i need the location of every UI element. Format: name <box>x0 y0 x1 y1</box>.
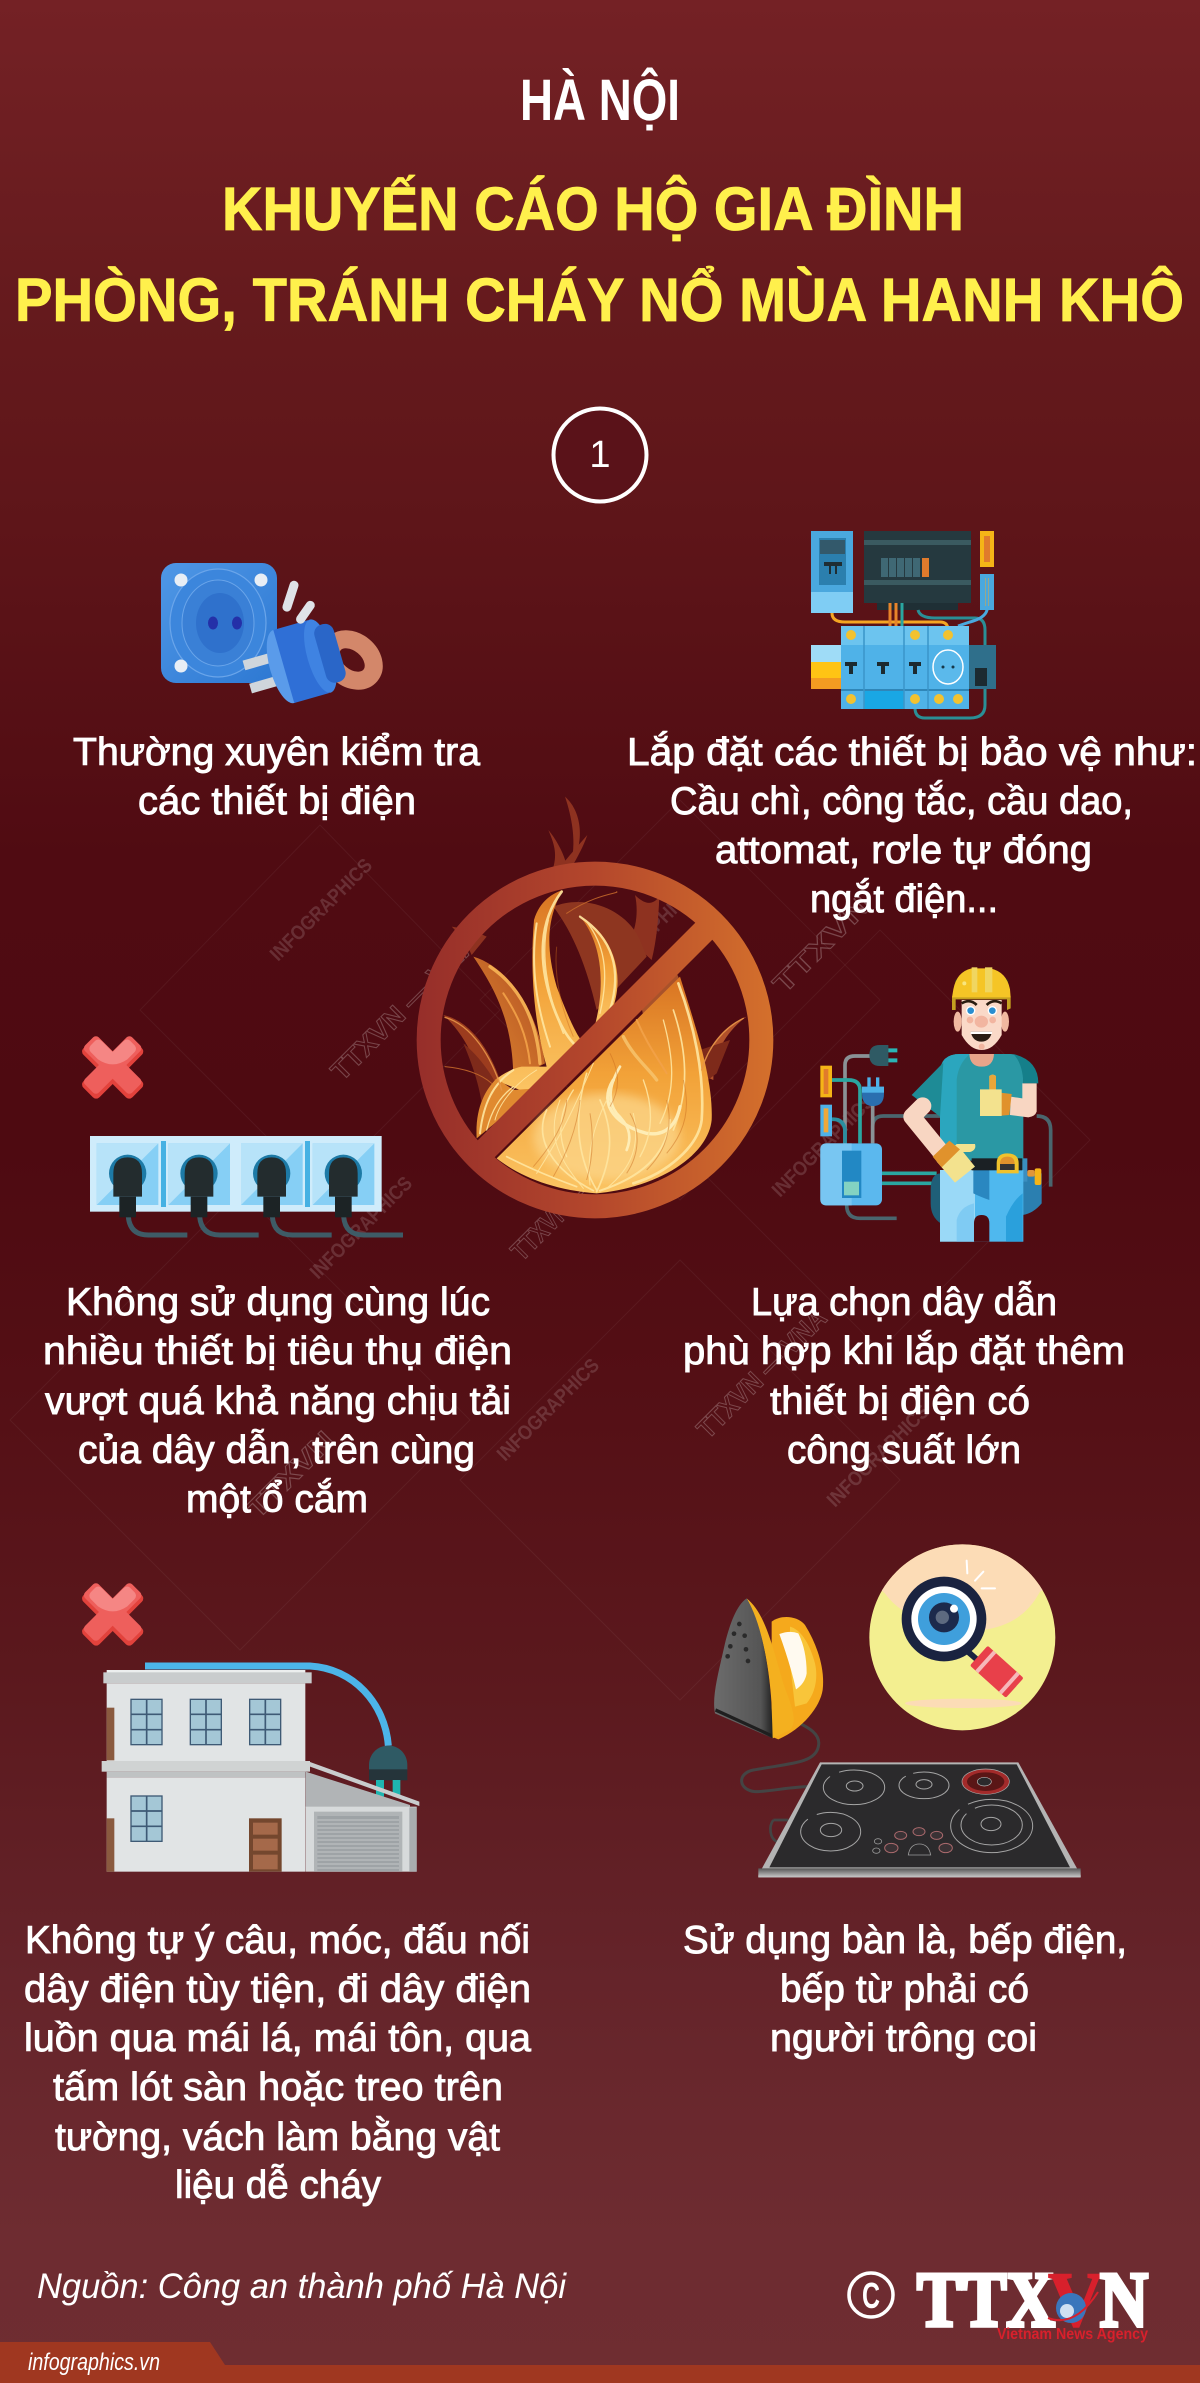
text: kiểm tra thiết bị điện: các thiết bị điện <box>138 780 416 823</box>
watermarks: INFOGRAPHICS <box>306 1173 417 1284</box>
logo: copyright TTXVN: Vietnam News Agency <box>997 2326 1148 2343</box>
watermarks: INFOGRAPHICS <box>266 855 377 966</box>
text: không sử dụng cùng lúc: của dây dẫn, trên cùng <box>78 1429 475 1472</box>
icon: electrician <box>820 967 1051 1242</box>
icon: overloaded power strip <box>90 1136 403 1235</box>
flames <box>443 797 747 1193</box>
number badge 1: 1 <box>589 434 611 476</box>
icon: inspection magnifier circle <box>869 1543 1055 1730</box>
text: kiểm tra thiết bị điện <box>73 731 480 823</box>
center icon: no fire sign <box>429 797 761 1206</box>
text: lựa chọn dây dẫn: Lựa chọn dây dẫn <box>751 1281 1057 1324</box>
title: khuyến cáo <box>15 175 1184 334</box>
text: không tự ý câu móc: tường, vách làm bằng vật <box>55 2116 500 2159</box>
prohibition ring and slash <box>429 874 761 1206</box>
icon: red cross 1 <box>80 1035 145 1101</box>
logo: copyright TTXVN <box>849 2256 1148 2343</box>
text: không tự ý câu móc: dây điện tùy tiện, đi dây điện <box>24 1968 531 2011</box>
watermarks: TTXVN <box>241 1425 340 1524</box>
text: không sử dụng cùng lúc: vượt quá khả năng chịu tải <box>45 1380 511 1423</box>
icon: socket and plug <box>161 563 382 714</box>
icon: electrical panel <box>811 531 996 718</box>
icon: house with wire and plug <box>102 1666 419 1872</box>
text: không sử dụng cùng lúc: Không sử dụng cùng lúc <box>66 1281 490 1324</box>
text: không sử dụng cùng lúc <box>43 1281 512 1521</box>
text: không tự ý câu móc: luồn qua mái lá, mái tôn, qua <box>24 2017 531 2060</box>
source: Nguồn: Công an thành phố Hà Nội <box>37 2267 567 2306</box>
watermarks <box>241 855 934 1524</box>
text: lắp đặt thiết bị bảo vệ <box>627 731 1197 921</box>
logo: copyright TTXVN: V <box>1048 2256 1104 2343</box>
text: không sử dụng cùng lúc: nhiều thiết bị tiêu thụ điện <box>43 1330 512 1373</box>
watermarks: TTXVN — VNA <box>325 927 484 1086</box>
text: không tự ý câu móc: liệu dễ cháy <box>175 2164 381 2207</box>
text: sử dụng bàn là: người trông coi <box>770 2017 1037 2060</box>
text: lựa chọn dây dẫn: công suất lớn <box>787 1429 1021 1472</box>
icon: red cross 2 <box>80 1582 145 1648</box>
footer bar: infographics.vn <box>28 2349 160 2376</box>
text: không tự ý câu móc: Không tự ý câu, móc, đấu nối <box>25 1919 530 1962</box>
text: lắp đặt thiết bị bảo vệ: ngắt điện... <box>810 878 998 921</box>
watermarks: INFOGRAPHICS <box>493 1355 604 1466</box>
logo: copyright TTXVN: C <box>862 2275 880 2316</box>
watermarks: INFOGRAPHICS <box>768 1091 879 1202</box>
text: lựa chọn dây dẫn: thiết bị điện có <box>770 1380 1030 1423</box>
text: lựa chọn dây dẫn <box>683 1281 1125 1472</box>
watermarks: INFOGRAPHICS <box>823 1401 934 1512</box>
text: lắp đặt thiết bị bảo vệ: attomat, rơle tự đóng <box>715 829 1092 872</box>
watermarks: TTXVN — VNA <box>691 1303 832 1444</box>
text: kiểm tra thiết bị điện: Thường xuyên kiểm tra <box>73 731 480 774</box>
text: sử dụng bàn là: bếp từ phải có <box>780 1968 1029 2011</box>
watermarks: TTXVN — VNA <box>505 1139 632 1266</box>
text: không tự ý câu móc: tấm lót sàn hoặc treo trên <box>53 2066 503 2109</box>
text: không tự ý câu móc <box>24 1919 531 2207</box>
logo: copyright TTXVN: N <box>1100 2256 1148 2343</box>
text: sử dụng bàn là: Sử dụng bàn là, bếp điện, <box>683 1919 1127 1962</box>
text: sử dụng bàn là <box>683 1919 1127 2060</box>
icon: iron <box>714 1598 823 1842</box>
text: lựa chọn dây dẫn: phù hợp khi lắp đặt thêm <box>683 1330 1125 1373</box>
watermarks: TTXVN <box>767 890 877 999</box>
logo: copyright TTXVN: TTX <box>917 2256 1055 2343</box>
number badge 1 <box>554 408 646 502</box>
watermarks: INFOGRAPHICS <box>588 883 699 994</box>
title: Hà Nội: HÀ NỘI <box>520 68 680 133</box>
text: lắp đặt thiết bị bảo vệ: Lắp đặt các thiết bị bảo vệ như: <box>627 731 1197 774</box>
text: lắp đặt thiết bị bảo vệ: Cầu chì, công tắc, cầu dao, <box>670 780 1133 823</box>
title: khuyến cáo: KHUYẾN CÁO HỘ GIA ĐÌNH <box>222 175 964 243</box>
text: không sử dụng cùng lúc: một ổ cắm <box>186 1478 368 1521</box>
icon: induction hob <box>758 1762 1081 1877</box>
footer bar <box>0 2342 1200 2383</box>
